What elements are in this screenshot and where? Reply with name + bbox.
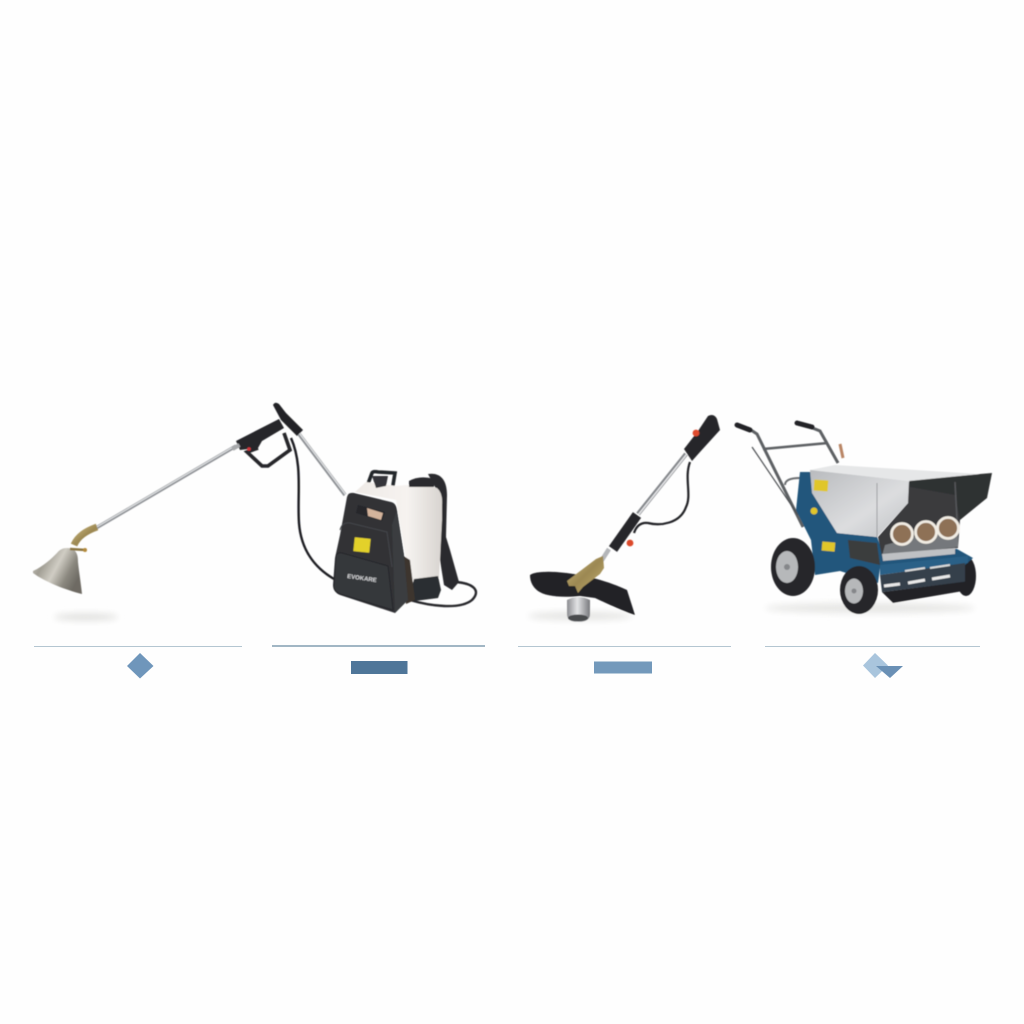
backpack body: [333, 493, 408, 613]
T handle: [273, 403, 303, 436]
pistol grip: [232, 419, 290, 466]
icon: diamond and triangle: [863, 653, 903, 678]
bell nozzle: [33, 548, 82, 594]
hopper face: [810, 470, 909, 537]
front wheel: [840, 566, 878, 614]
wand shaft: [96, 445, 236, 528]
shadow under bell: [54, 614, 118, 620]
hopper top: [810, 465, 980, 481]
red knob: [627, 540, 633, 546]
roller 1: [892, 524, 912, 544]
tank: [355, 482, 442, 582]
divider 2: [272, 645, 485, 647]
divider 4: [765, 646, 980, 648]
black sleeve: [613, 515, 637, 549]
chute black: [909, 473, 992, 520]
panel: string trimmer: [528, 415, 720, 622]
panel: spray wand and backpack: [33, 403, 476, 620]
brass elbow: [70, 527, 97, 552]
upper pocket stitch: [340, 523, 392, 567]
blue chassis: [796, 472, 973, 583]
bottom hose loop: [410, 582, 476, 606]
backpack side: [392, 510, 408, 613]
silver parts: [882, 548, 955, 561]
tine row: [880, 563, 965, 592]
tank cap: [409, 477, 434, 487]
cutting head: [567, 597, 590, 622]
divider 1: [34, 646, 242, 648]
icon: mid bar: [594, 662, 652, 674]
control handle: [684, 415, 720, 461]
brand text: EVOKARE: [347, 574, 377, 584]
icon: dark bar: [351, 661, 408, 674]
roller 2: [916, 522, 936, 542]
front pocket: [334, 553, 393, 610]
blue cross beam: [880, 556, 968, 575]
back wheel: [956, 556, 976, 596]
rear shaft: [299, 434, 346, 495]
guard: [530, 572, 635, 615]
ground shadow: [528, 612, 632, 620]
side hardware: [402, 555, 415, 604]
roller machinery: [882, 525, 958, 556]
machinery backing: [878, 482, 960, 556]
ground shadow: [765, 603, 975, 613]
top handle opening: [356, 505, 385, 521]
power cord: [634, 462, 690, 533]
engine bay: [848, 540, 880, 565]
lower black flap: [882, 581, 970, 603]
upper shaft: [638, 454, 686, 514]
divider 3: [518, 646, 731, 648]
handlebars: [737, 423, 843, 527]
icon: diamond: [127, 653, 154, 678]
shoulder straps: [428, 474, 459, 590]
brass bracket: [567, 556, 604, 593]
warning label: [353, 537, 371, 553]
carry frame: [365, 472, 395, 497]
hopper seam: [876, 483, 878, 537]
panel: walk-behind spreader: [737, 423, 992, 614]
yellow labels: [810, 480, 835, 552]
roller 3: [938, 518, 958, 538]
hose to backpack: [291, 438, 334, 579]
frame hardware: [372, 476, 388, 488]
lower shaft: [600, 549, 609, 563]
red switch: [693, 430, 699, 436]
chute divider: [955, 482, 957, 520]
tank base: [410, 576, 441, 601]
handle gap: [367, 508, 383, 520]
big wheel: [771, 538, 815, 596]
